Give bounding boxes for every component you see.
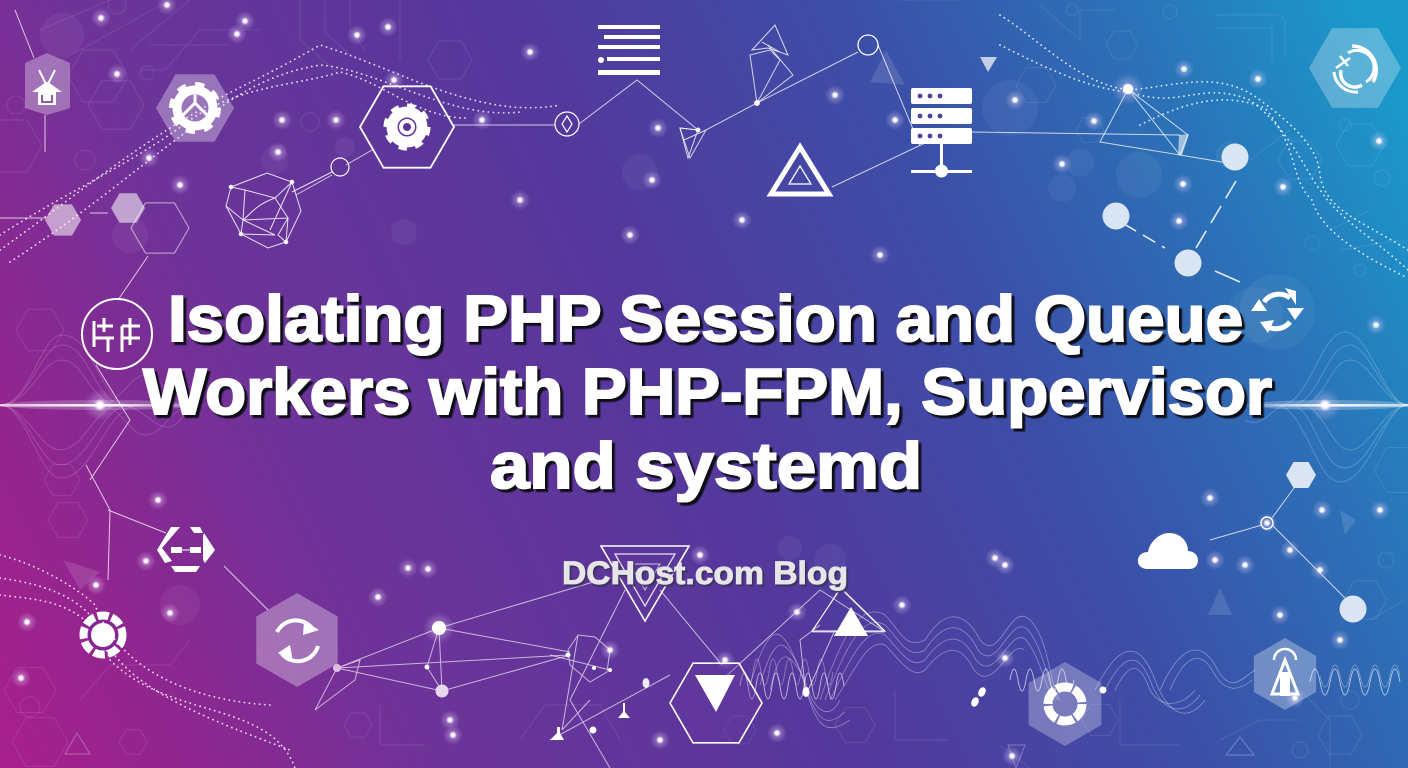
icon: outlined hexagon with gear bbox=[360, 86, 454, 168]
right wave lines bbox=[1245, 332, 1408, 482]
icon: sync hexagon bottom-left bbox=[256, 593, 338, 687]
icon: nodes lower right bbox=[1257, 462, 1366, 622]
icon: circular network badge bbox=[82, 299, 152, 369]
icon: outlined hexagon with inverted triangle bbox=[670, 663, 762, 743]
icon: small dumbbell nodes bbox=[550, 652, 1106, 740]
title bbox=[143, 282, 1272, 502]
icon: small translucent hexagons bbox=[45, 193, 145, 236]
constellation lines bottom bbox=[315, 580, 885, 768]
subtitle: DCHost.com Blog bbox=[562, 555, 848, 591]
faint translucent bokeh discs bbox=[40, 13, 1283, 625]
icon: wireframe triangles top centre bbox=[680, 25, 788, 158]
constellation lines top bbox=[0, 10, 1345, 610]
icon: outlined hexagon left bbox=[131, 203, 189, 253]
icon: outlined polygon node bottom bbox=[333, 612, 455, 698]
icon: nested inverted triangles bbox=[601, 546, 689, 621]
icon: list rows bbox=[598, 25, 660, 75]
title: Isolating PHP Session and Queue bbox=[168, 282, 1243, 355]
icon: small diamond ring bbox=[555, 112, 579, 136]
icon: segmented gear bottom-left bbox=[84, 616, 122, 654]
bottom waveform bbox=[740, 659, 1400, 699]
outlined triangles decoration bbox=[65, 733, 1254, 768]
bottom waveform humps bbox=[750, 612, 1255, 728]
icon: lower-right tree hexagon bbox=[1254, 638, 1316, 710]
icon: server rack bbox=[911, 88, 972, 178]
icon: filled hexagon with gear bbox=[156, 74, 234, 142]
icon: small ring node bbox=[331, 158, 349, 176]
icon: lower hexagon with segmented ring bbox=[1029, 662, 1101, 746]
small triangles decoration bbox=[63, 50, 1356, 615]
icon: glowing apex node with triangles bbox=[1112, 73, 1189, 155]
icon: network nodes right bbox=[1102, 144, 1248, 276]
icon: top-right radial hexagon bbox=[1309, 28, 1401, 108]
icon: top-left shield hexagon bbox=[25, 53, 70, 115]
icon: cloud bbox=[1138, 533, 1198, 569]
icon: bracket hexagon bbox=[157, 527, 215, 572]
horizontal lens flare bbox=[0, 389, 1408, 421]
icon: ring node top bbox=[858, 35, 878, 55]
icon: triangle in triangle bbox=[771, 147, 829, 194]
icon: sync arrows right bbox=[1239, 274, 1315, 350]
icon: small triangle top bbox=[980, 57, 997, 72]
title: Workers with PHP-FPM, Supervisor bbox=[143, 355, 1272, 428]
icon: polyhedron wireframe bbox=[226, 172, 332, 248]
icon: triangle in outline bbox=[812, 588, 885, 636]
title: and systemd bbox=[490, 429, 922, 502]
left wave lines bbox=[0, 335, 195, 478]
dashed node connectors bbox=[1124, 181, 1240, 282]
